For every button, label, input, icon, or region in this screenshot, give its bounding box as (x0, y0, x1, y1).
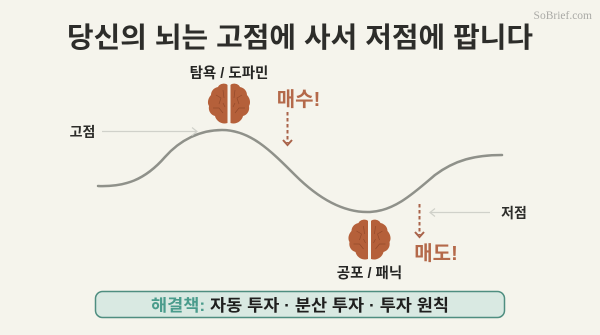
solution banner (96, 292, 504, 318)
arrow: buy dashed (283, 112, 292, 145)
title: 당신의 뇌는 고점에 사서 저점에 팝니다 (67, 22, 533, 53)
solution banner: 해결책: 자동 투자 · 분산 투자 · 투자 원칙 (151, 296, 449, 315)
arrow: sell dashed (415, 204, 424, 237)
icon: brain at trough (348, 220, 391, 260)
label: greed and dopamine: 탐욕 / 도파민 (190, 65, 268, 82)
label: peak: 고점 (70, 124, 95, 140)
icon: brain at peak (208, 84, 250, 124)
arrow: peak pointer (102, 128, 197, 136)
label: sell: 매도! (414, 242, 458, 265)
label: buy: 매수! (277, 88, 320, 111)
market cycle curve (98, 130, 502, 212)
label: fear and panic: 공포 / 패닉 (337, 265, 402, 282)
arrow: trough pointer (430, 208, 490, 216)
label: trough: 저점 (501, 205, 527, 221)
watermark: SoBrief.com (534, 10, 592, 22)
